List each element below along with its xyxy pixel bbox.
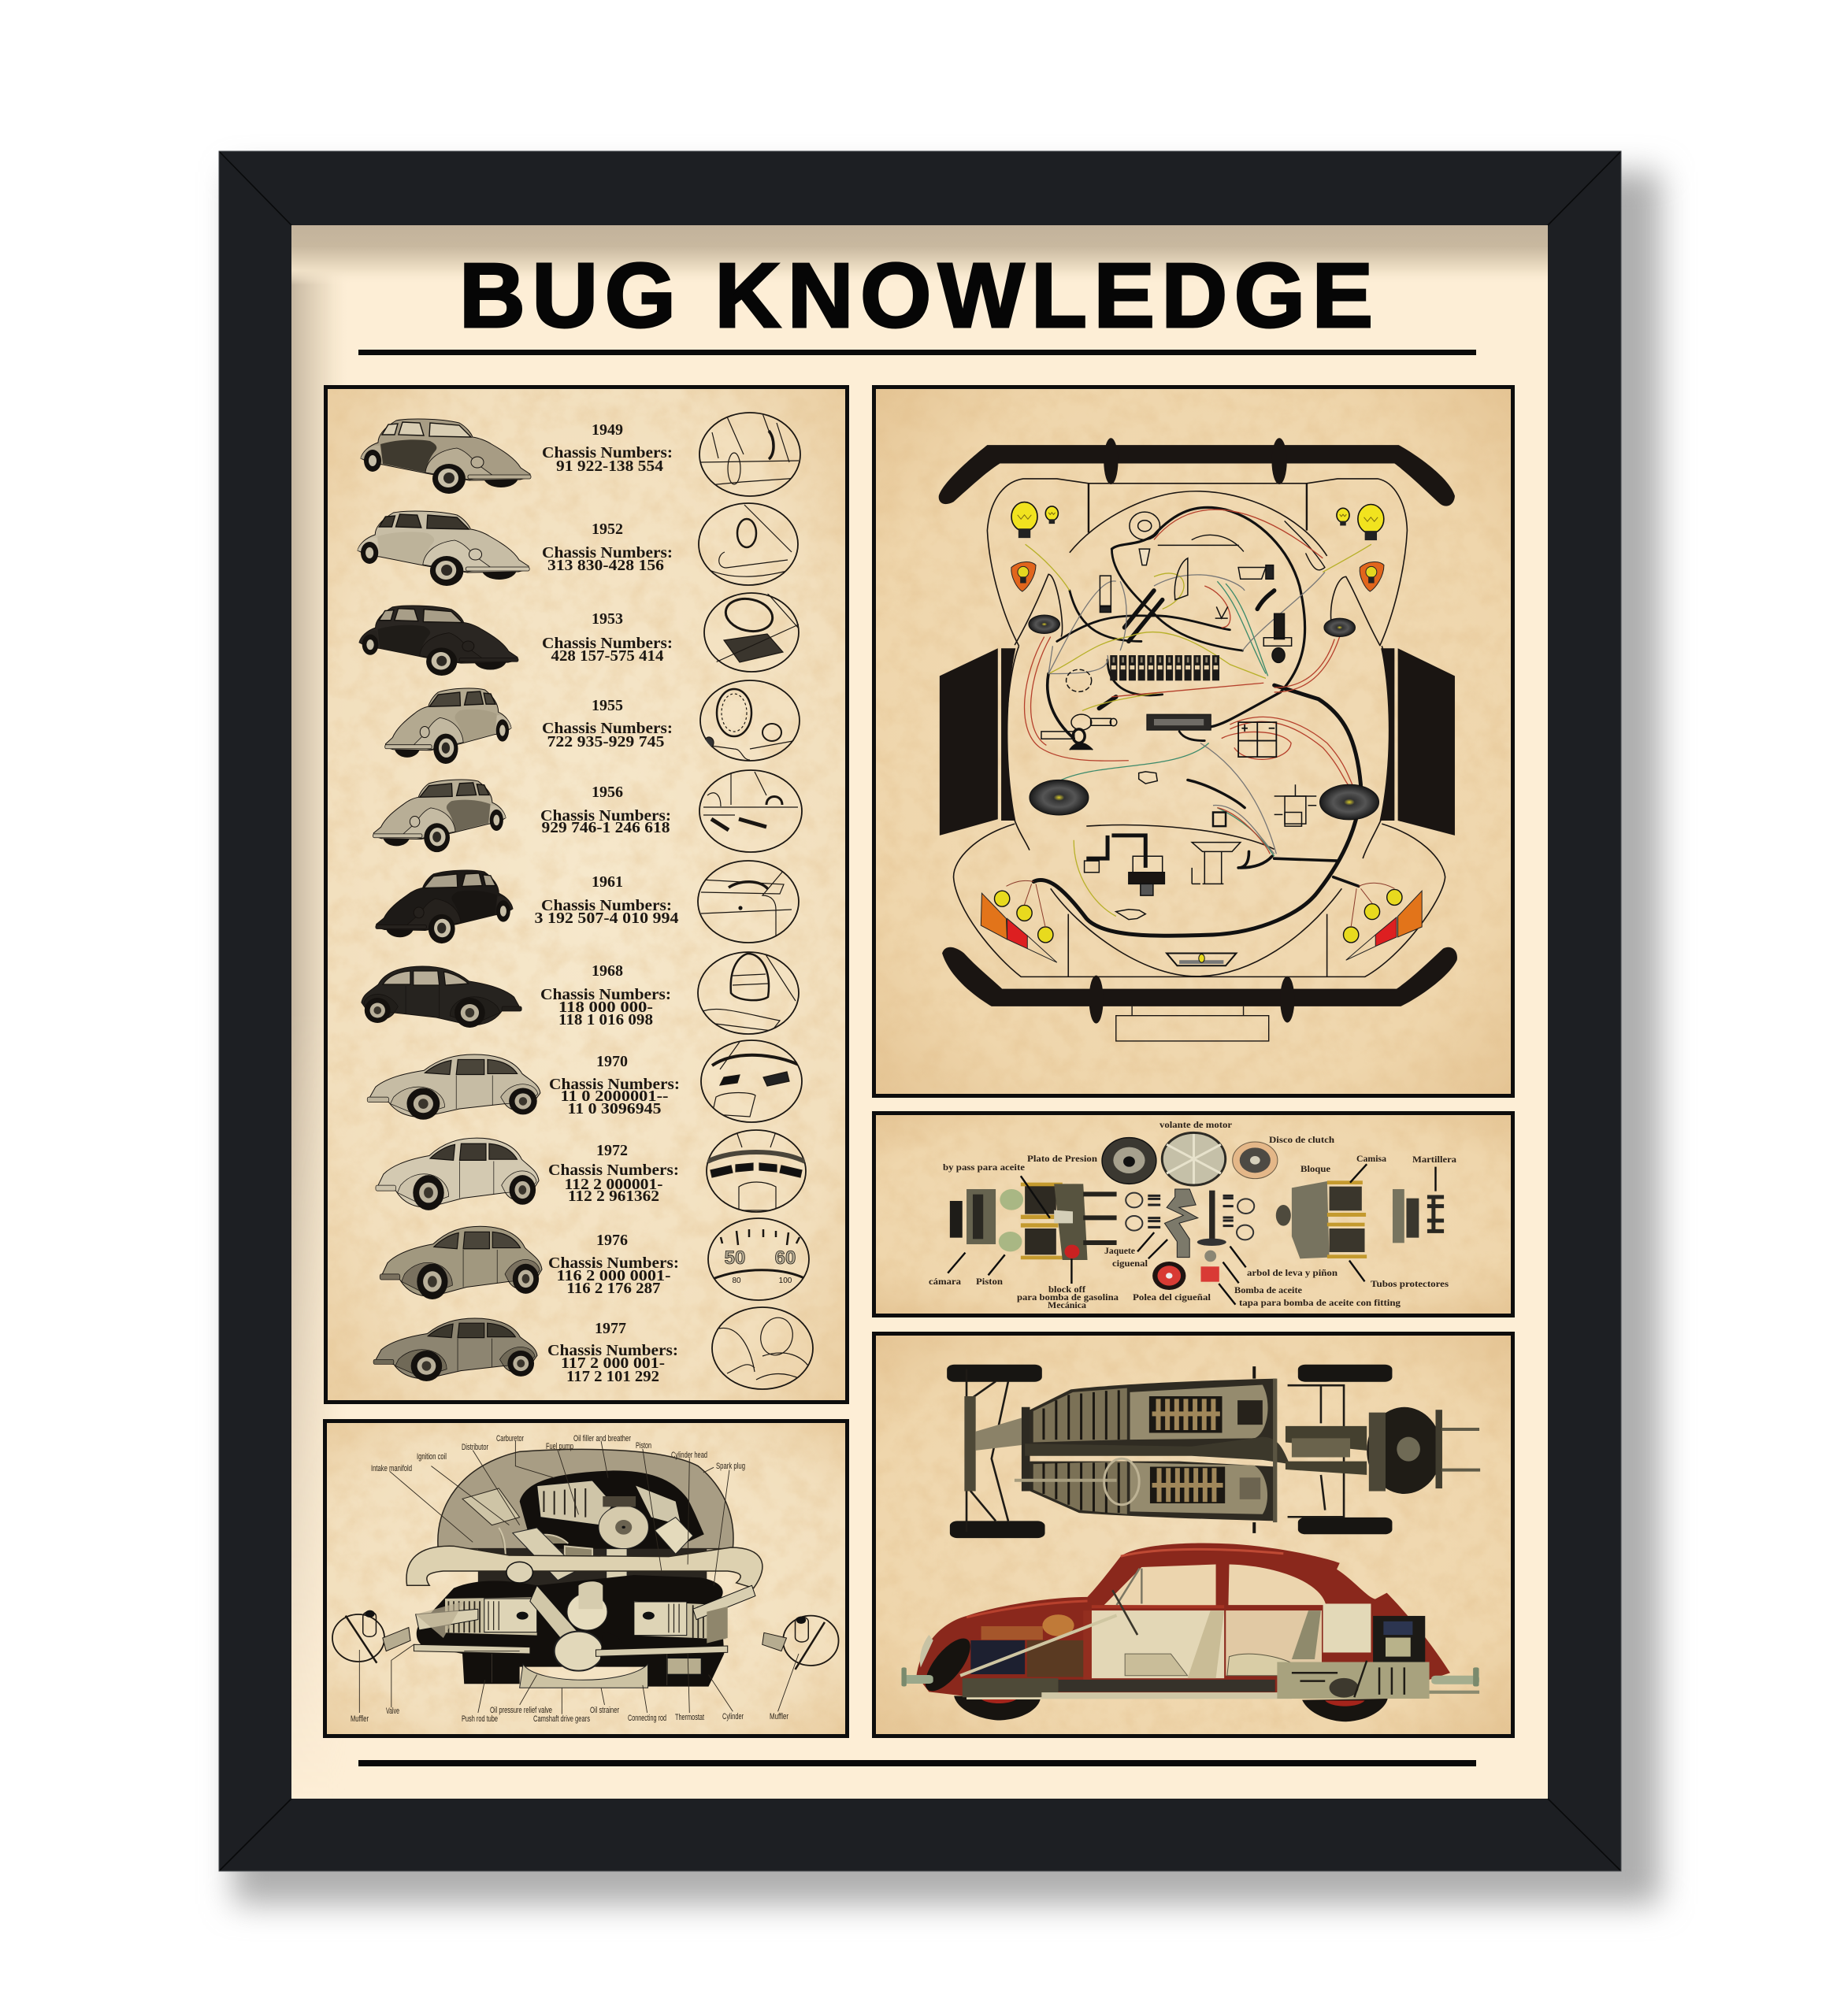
panel: chassis and cutaway xyxy=(874,1334,1512,1736)
exploded labels: arbol de leva y piñon xyxy=(1247,1267,1338,1278)
row 1961: 1961 xyxy=(592,873,623,891)
engine labels: Intake manifold xyxy=(371,1464,412,1473)
engine labels: Carburetor xyxy=(496,1434,524,1443)
engine labels xyxy=(351,1434,788,1724)
engine labels: Cylinder xyxy=(722,1712,744,1721)
engine labels: Camshaft drive gears xyxy=(533,1714,590,1724)
leader lines xyxy=(359,1441,799,1714)
engine labels: Spark plug xyxy=(716,1462,745,1471)
callout arrows xyxy=(948,1164,1435,1305)
row 1976: 50 xyxy=(725,1247,745,1269)
row 1955: 1955 xyxy=(592,697,623,714)
row 1952: 313 830-428 156 xyxy=(547,557,664,574)
exploded labels: Tubos protectores xyxy=(1371,1278,1449,1289)
row 1968: Chassis Numbers: xyxy=(540,986,671,1003)
row 1970: 11 0 2000001-- xyxy=(561,1088,668,1105)
row 1968: 118 000 000- xyxy=(558,999,653,1016)
row 1976: 80 xyxy=(732,1277,741,1285)
cutaway side view xyxy=(901,1543,1479,1721)
exploded labels: para bomba de gasolina xyxy=(1017,1292,1119,1303)
cream mat xyxy=(291,225,1548,1799)
row 1961 xyxy=(376,861,799,943)
title: BUG KNOWLEDGE xyxy=(459,244,1373,346)
engine labels: Ignition coil xyxy=(417,1452,447,1462)
engine labels: Muffler xyxy=(351,1714,369,1724)
row 1968 xyxy=(362,952,799,1034)
row 1972: Chassis Numbers: xyxy=(548,1162,679,1179)
row 1976: Chassis Numbers: xyxy=(548,1254,679,1272)
row 1970: 11 0 3096945 xyxy=(567,1100,662,1117)
row 1976: 60 xyxy=(775,1247,796,1269)
exploded labels: Bloque xyxy=(1300,1163,1331,1174)
row 1952: 1952 xyxy=(592,521,623,538)
row 1956: 929 746-1 246 618 xyxy=(542,819,670,836)
row 1970: 1970 xyxy=(596,1053,628,1070)
body outline xyxy=(954,479,1445,976)
row 1956 xyxy=(373,770,802,852)
row 1952: Chassis Numbers: xyxy=(542,544,673,561)
row 1952 xyxy=(358,503,799,586)
battery xyxy=(1238,722,1276,757)
speakers xyxy=(1029,615,1379,820)
row 1953: Chassis Numbers: xyxy=(542,635,673,652)
exploded labels: Camisa xyxy=(1356,1153,1386,1164)
row 1961: Chassis Numbers: xyxy=(541,897,672,914)
panel: wiring diagram xyxy=(874,387,1512,1096)
tail lights xyxy=(981,880,1422,962)
exploded labels: cámara xyxy=(929,1276,961,1287)
exploded labels: Martillera xyxy=(1412,1154,1456,1165)
row 1972: 112 2 000001- xyxy=(564,1176,663,1193)
exploded labels: volante de motor xyxy=(1159,1119,1233,1130)
row 1968: 118 1 016 098 xyxy=(558,1011,653,1028)
row 1976: 116 2 176 287 xyxy=(567,1280,660,1297)
running boards xyxy=(940,648,1455,836)
row 1968: 1968 xyxy=(592,962,623,980)
front bumper xyxy=(939,438,1455,506)
radio xyxy=(1147,714,1211,730)
exploded labels: Bomba de aceite xyxy=(1234,1284,1303,1295)
row 1977: 1977 xyxy=(595,1320,626,1337)
row 1949 xyxy=(361,413,800,496)
exploded labels: Disco de clutch xyxy=(1269,1134,1334,1145)
row 1956: 1956 xyxy=(592,784,623,801)
engine labels: Oil strainer xyxy=(590,1706,619,1715)
exploded labels: block off xyxy=(1048,1284,1086,1295)
licence plate light xyxy=(1167,953,1236,965)
row 1953: 1953 xyxy=(592,610,623,628)
engine labels: Piston xyxy=(636,1441,651,1451)
thick wiring loom xyxy=(1033,507,1360,936)
row 1953: 428 157-575 414 xyxy=(551,647,663,665)
row 1961: 3 192 507-4 010 994 xyxy=(534,910,679,927)
engine labels: Push rod tube xyxy=(462,1714,498,1724)
engine drawing xyxy=(332,1441,839,1714)
engine labels: Valve xyxy=(386,1707,399,1716)
exploded labels xyxy=(929,1119,1456,1310)
row 1977 xyxy=(373,1307,813,1389)
misc electrical parts xyxy=(1041,512,1316,920)
exploded labels: Jaquete xyxy=(1104,1245,1136,1256)
exploded labels: by pass para aceite xyxy=(943,1162,1026,1173)
exploded labels: Polea del cigueñal xyxy=(1133,1292,1211,1303)
footer rule xyxy=(358,1760,1476,1766)
engine labels: Thermostat xyxy=(675,1713,704,1722)
panel: chassis number timeline xyxy=(326,387,848,1402)
fuse box xyxy=(1110,655,1219,680)
picture frame xyxy=(219,151,1621,1871)
engine labels: Cylinder head xyxy=(671,1451,707,1460)
engine labels: Connecting rod xyxy=(628,1714,666,1723)
row 1949: 91 922-138 554 xyxy=(556,458,663,475)
row 1949: 1949 xyxy=(592,421,623,439)
engine labels: Oil filler and breather xyxy=(573,1434,631,1443)
row 1955: 722 935-929 745 xyxy=(547,733,665,750)
row 1972: 1972 xyxy=(596,1142,628,1159)
row 1972: 112 2 961362 xyxy=(568,1188,659,1205)
row 1953 xyxy=(359,593,799,676)
row 1970 xyxy=(367,1040,802,1122)
row 1976 xyxy=(380,1218,809,1300)
row 1977: 117 2 000 001- xyxy=(561,1354,665,1372)
exploded labels: Piston xyxy=(976,1276,1003,1287)
row 1955 xyxy=(385,680,800,764)
row 1976: 100 xyxy=(779,1277,792,1285)
engine labels: Oil pressure relief valve xyxy=(490,1706,552,1715)
engine labels: Muffler xyxy=(770,1712,788,1721)
row 1949: Chassis Numbers: xyxy=(542,444,673,461)
row 1976: 116 2 000 0001- xyxy=(556,1267,671,1284)
row 1977: 117 2 101 292 xyxy=(566,1368,659,1385)
chassis top view xyxy=(947,1365,1480,1538)
frame drop shadow xyxy=(233,172,1660,1904)
row 1956: Chassis Numbers: xyxy=(540,807,671,825)
exploded parts xyxy=(948,1132,1444,1305)
title rule xyxy=(358,350,1476,355)
row 1976: 1976 xyxy=(596,1232,628,1249)
exploded labels: Mecánica xyxy=(1048,1299,1086,1310)
rear bumper and plate xyxy=(942,947,1457,1041)
panel: engine cutaway xyxy=(325,1421,848,1736)
panel: exploded engine xyxy=(874,1114,1512,1315)
lights: front xyxy=(1011,502,1384,591)
row 1955: Chassis Numbers: xyxy=(542,720,673,737)
engine labels: Fuel pump xyxy=(546,1442,573,1451)
exploded labels: tapa para bomba de aceite con fitting xyxy=(1239,1297,1401,1308)
engine labels: Distributor xyxy=(462,1443,488,1452)
exploded labels: Plato de Presion xyxy=(1027,1153,1097,1164)
row 1977: Chassis Numbers: xyxy=(547,1342,678,1359)
exploded labels: ciguenal xyxy=(1112,1258,1148,1269)
row 1970: Chassis Numbers: xyxy=(549,1076,680,1093)
row 1972 xyxy=(376,1130,806,1212)
coloured thin wires xyxy=(1025,510,1371,917)
